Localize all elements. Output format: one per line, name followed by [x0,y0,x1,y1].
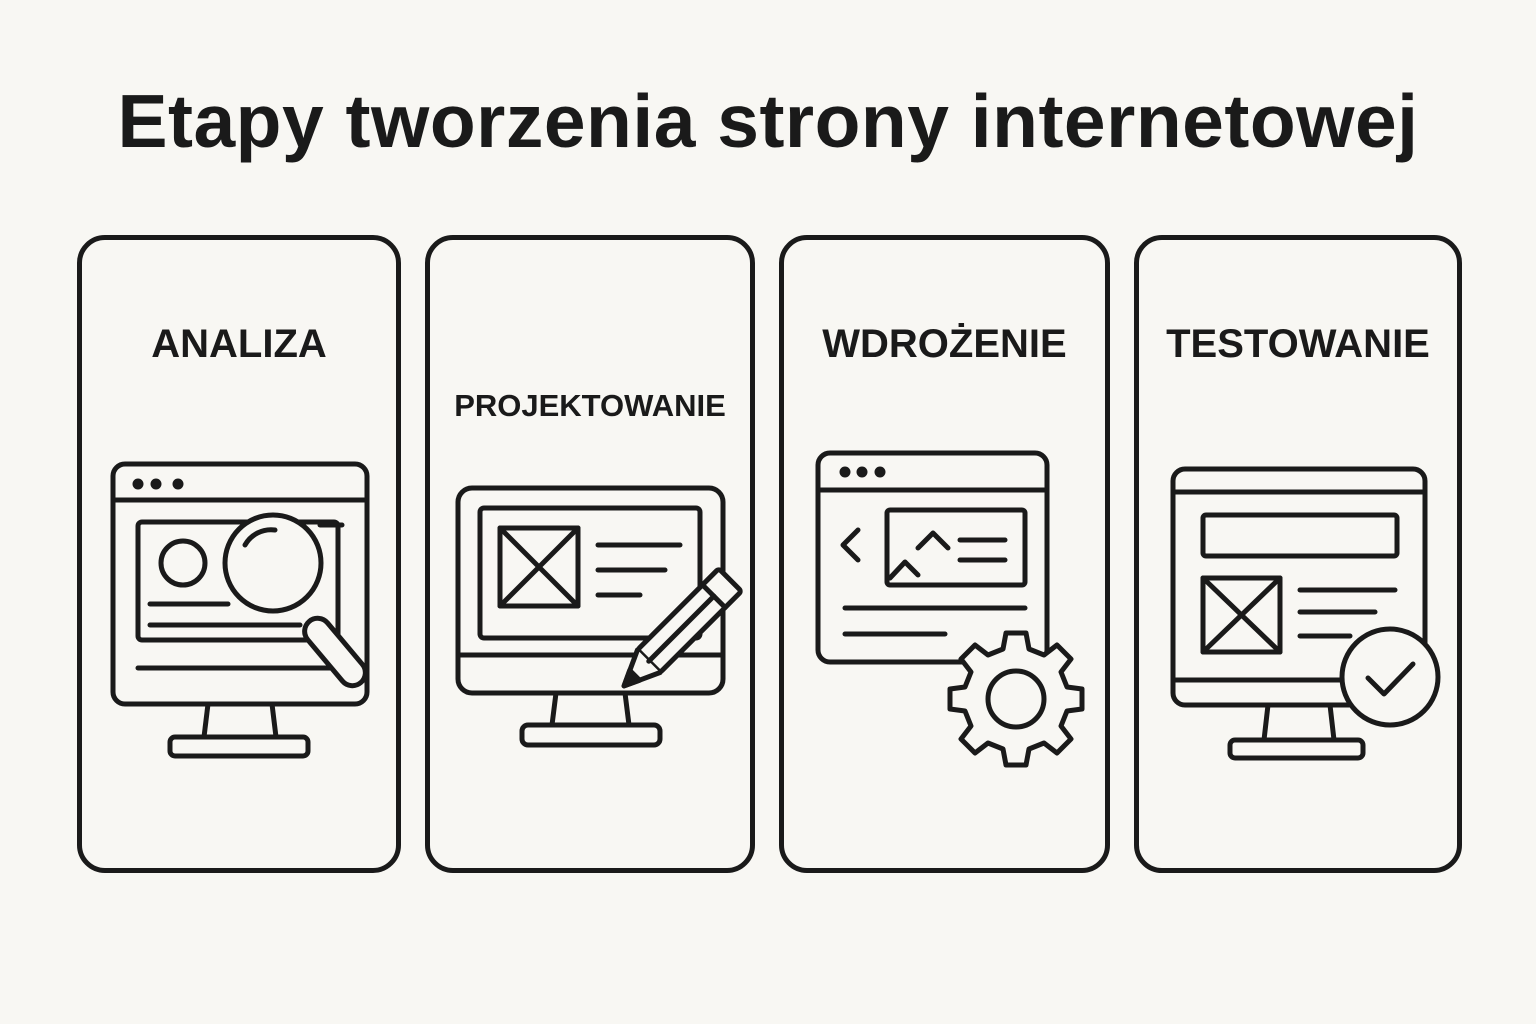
panel: testowanie [1134,235,1462,873]
label: testowanie: TESTOWANIE [1166,322,1430,366]
icon: browser with gear [818,453,1082,765]
icon: monitor with pencil [458,488,741,745]
label: projektowanie: PROJEKTOWANIE [454,388,726,423]
icon: monitor with magnifier [113,464,371,756]
title: Etapy tworzenia strony internetowej [117,79,1419,163]
panel: wdrozenie [779,235,1110,873]
label: analiza: ANALIZA [151,322,327,366]
icon: monitor with check [1173,469,1438,758]
label: wdrozenie: WDROŻENIE [822,322,1067,366]
panel: analiza [77,235,401,873]
panel: projektowanie [425,235,755,873]
